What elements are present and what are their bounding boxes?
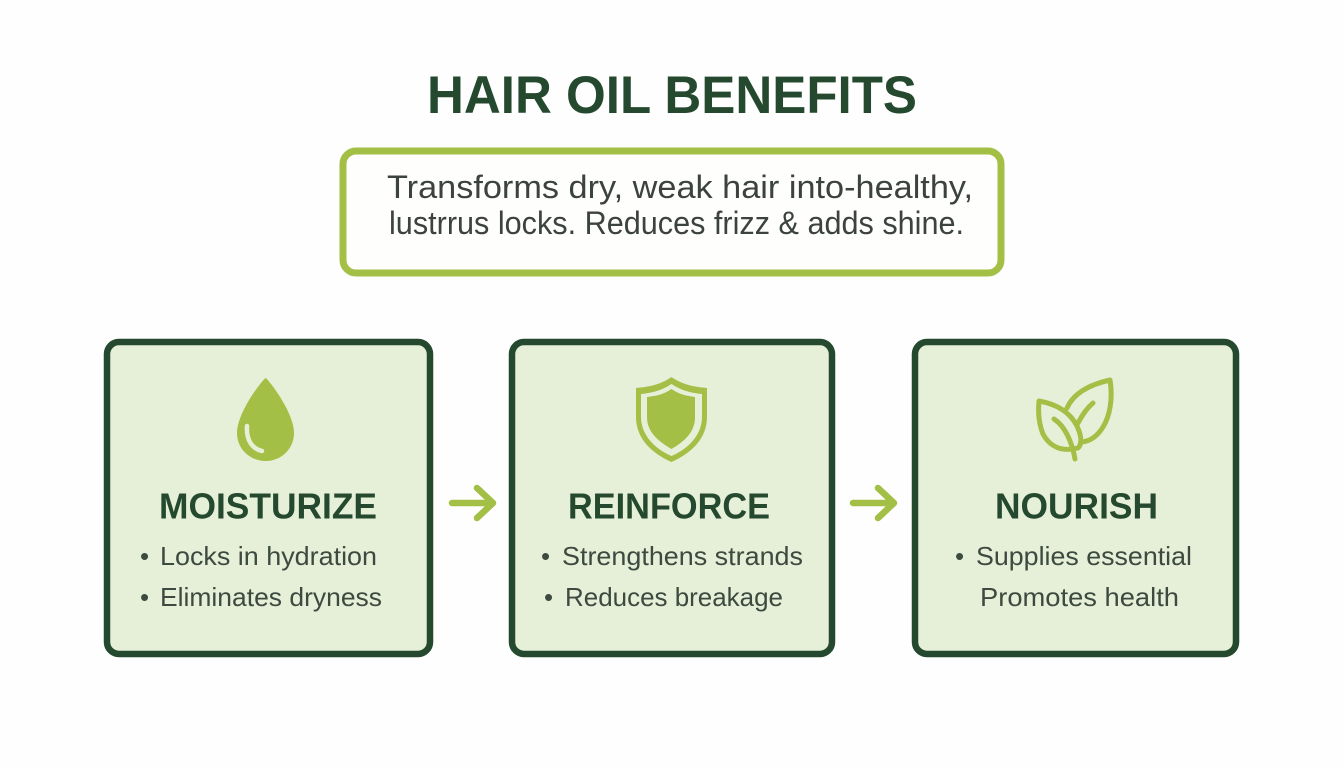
arrow: moisturize to reinforce: [452, 488, 493, 518]
title: HAIR OIL BENEFITS: [427, 66, 917, 125]
bullet list: moisturize: Locks in hydration: [160, 541, 377, 571]
panel: moisturize: [107, 342, 430, 654]
bullet list: moisturize: [140, 541, 382, 612]
bullet list: moisturize: •: [140, 582, 149, 612]
bullet list: moisturize: Eliminates dryness: [160, 582, 382, 612]
bullet list: nourish: [955, 541, 1192, 612]
arrow: reinforce to nourish: [853, 488, 894, 518]
bullet list: reinforce: •: [544, 582, 553, 612]
bullet list: nourish: •: [955, 541, 964, 571]
panel: reinforce: [512, 342, 832, 654]
heading: nourish: NOURISH: [995, 486, 1158, 526]
panel: nourish: [915, 342, 1236, 654]
heading: reinforce: REINFORCE: [568, 486, 770, 526]
icon: shield: [636, 377, 707, 462]
bullet list: nourish: Supplies essential: [976, 541, 1192, 571]
bullet list: reinforce: Strengthens strands: [562, 541, 803, 571]
heading: moisturize: MOISTURIZE: [159, 486, 377, 526]
bullet list: reinforce: Reduces breakage: [565, 582, 783, 612]
callout text: lustrrus locks. Reduces frizz & adds shine.: [389, 205, 964, 241]
callout text: [387, 169, 973, 241]
icon: oil drop: [237, 378, 294, 461]
bullet list: nourish: Promotes health: [980, 582, 1179, 612]
bullet list: reinforce: [541, 541, 803, 612]
icon: leaves: [1039, 380, 1111, 459]
bullet list: reinforce: •: [541, 541, 550, 571]
bullet list: moisturize: •: [140, 541, 149, 571]
callout text: Transforms dry, weak hair into-healthy,: [387, 169, 973, 205]
callout: [343, 151, 1001, 273]
